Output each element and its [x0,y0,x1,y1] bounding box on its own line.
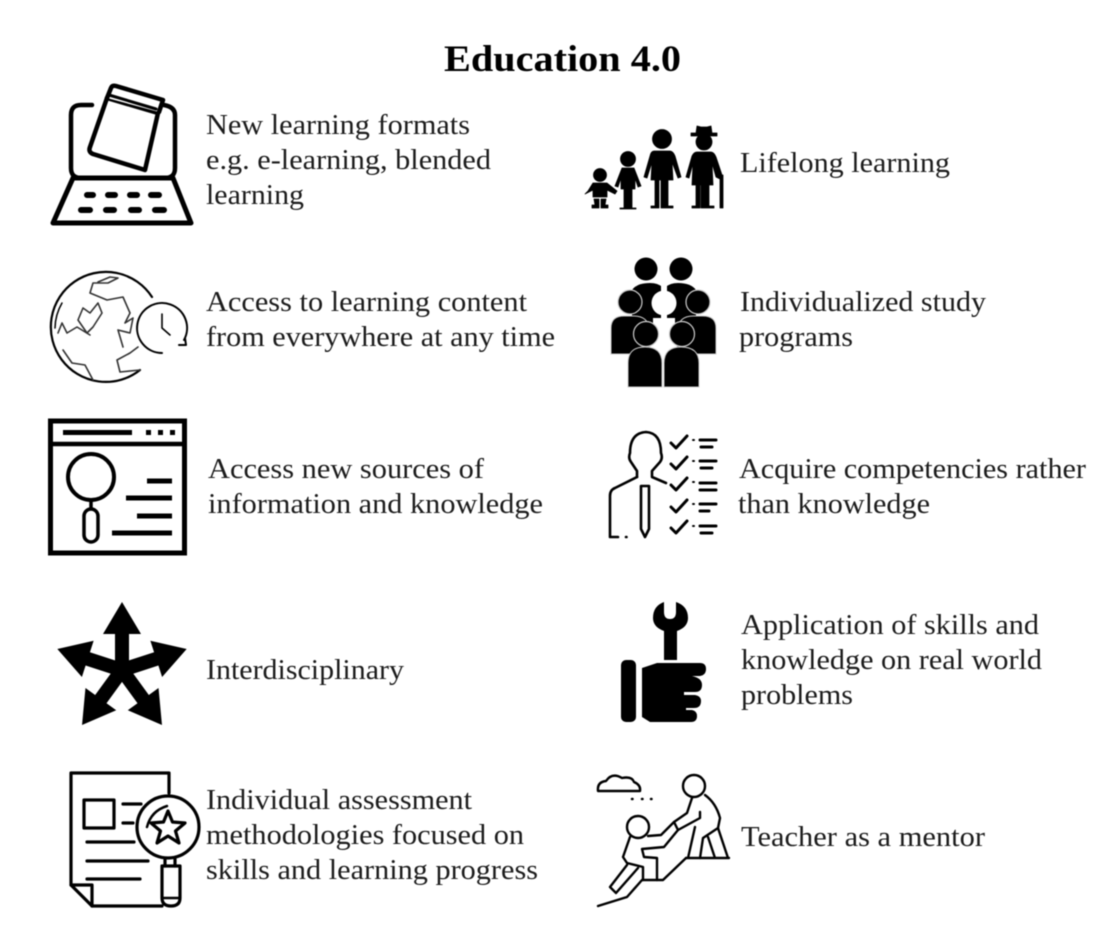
text: application of skills [741,609,1043,711]
text: acquire competencies: than knowledge [738,488,930,520]
text: individualized study programs: programs [739,321,853,353]
text: individual assessment: skills and learning progress [206,854,538,886]
text: new learning formats [206,109,492,211]
item: application of skills [621,602,1043,722]
text: access new sources: Access new sources of [208,453,484,485]
text: new learning formats: e.g. e-learning, blended [206,144,492,176]
item: teacher as a mentor [598,775,985,906]
text: access to learning content: Access to learning content [206,286,527,318]
icon: hand holding wrench [621,602,706,722]
icon: laptop with book [53,86,191,223]
text: individual assessment: Individual assessment [206,784,472,816]
text: new learning formats: learning [206,179,304,211]
text: teacher as a mentor: Teacher as a mentor [741,821,985,853]
text: access to learning content [206,286,555,353]
item: individualized study programs [611,258,987,387]
text: individualized study programs [739,286,987,353]
item: access to learning content [51,272,555,382]
title: Education 4.0 [444,39,681,80]
icon: globe and clock [51,272,187,382]
text: interdisciplinary: Interdisciplinary [206,654,405,686]
text: individual assessment: methodologies focused on [206,819,525,851]
text: new learning formats: New learning formats [206,109,470,141]
text: application of skills: Application of skills and [741,609,1040,641]
item: access new sources [50,421,543,553]
text: individual assessment [206,784,538,886]
icon: family of four ages [585,126,723,209]
item: individual assessment [71,773,538,906]
text: acquire competencies: Acquire competencies rather [739,453,1086,485]
text: lifelong learning: Lifelong learning [740,147,950,179]
text: individualized study programs: Individualized study [740,286,987,318]
text: access to learning content: from everywhere at any time [206,321,555,353]
text: access new sources: information and knowledge [208,488,543,520]
icon: five outward arrows [51,602,193,736]
text: application of skills: knowledge on real world [741,644,1043,676]
icon: person with checklist [610,432,716,537]
icon: mentor pulling student uphill [598,775,729,906]
text: application of skills: problems [741,679,853,711]
item: acquire competencies [610,432,1086,537]
text: access new sources [208,453,543,520]
icon: document with star magnifier [71,773,199,906]
text: acquire competencies [738,453,1086,520]
item: lifelong learning [585,126,950,209]
icon: group of people [611,258,716,387]
icon: browser window with magnifier [50,421,185,553]
item: new learning formats [53,86,492,223]
item: interdisciplinary [51,602,405,736]
